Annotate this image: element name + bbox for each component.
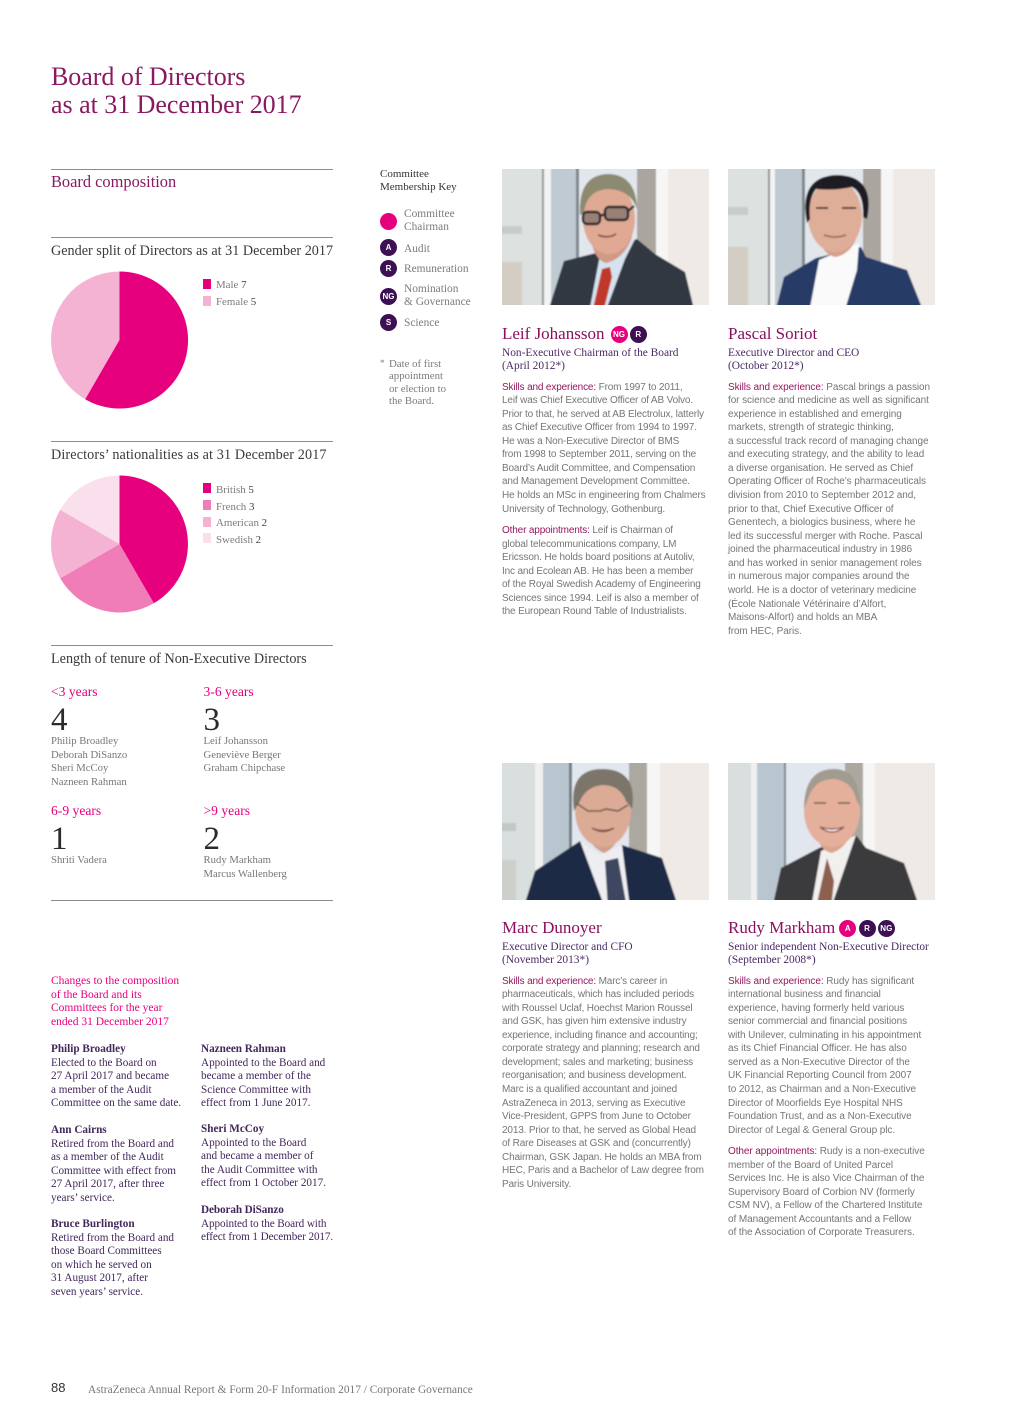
change: Deborah DiSanzo: Deborah DiSanzo [201,1204,284,1216]
changes heading: ended 31 December 2017 [51,1016,169,1028]
key heading: Membership Key [380,181,457,193]
change: Philip Broadley: 27 April 2017 and became [51,1070,169,1082]
biography: Marc Dunoyer: development; sales and marketing; business [502,1057,693,1068]
biography: Leif Johansson: as Chief Executive Officer from 1994 to 1997. [502,422,697,433]
badge: R: R [864,924,870,932]
change: Philip Broadley: Elected to the Board on [51,1057,157,1069]
key item: nomination and governance: & Governance [404,296,471,308]
legend: nationalities: American 2 [216,517,267,529]
tenure block: 3-6 years: Geneviève Berger [204,748,281,760]
biography: Marc Dunoyer: corporate strategy and planning; research and [502,1043,700,1054]
biography: Pascal Soriot: Operating Officer of Roche’s pharmaceuticals [728,476,926,487]
title: Board of Directors [51,62,245,91]
name: Marc Dunoyer: Marc Dunoyer [502,918,602,937]
biography: Marc Dunoyer: reorganisation; and business development. [502,1070,687,1081]
footnote: Date of first [389,358,441,370]
key heading [380,168,457,193]
change: Nazneen Rahman: became a member of the [201,1070,311,1082]
footnote: the Board. [389,395,434,407]
heading: board composition: Board composition [51,172,176,191]
tenure block: 3-6 years [204,684,285,774]
tenure block: under 3 years [51,684,127,788]
other appointments: Leif Johansson: the European Round Table of Industrialists. [502,606,687,617]
change: Sheri McCoy: effect from 1 October 2017. [201,1177,326,1189]
change: Ann Cairns: Retired from the Board and [51,1138,174,1150]
legend: nationalities: Swedish 2 [216,534,261,546]
change: Deborah DiSanzo: Appointed to the Board with [201,1218,326,1230]
photo: Leif Johansson [502,169,709,305]
biography: Marc Dunoyer: and GSK, has given him extensive industry [502,1016,687,1027]
biography: Marc Dunoyer: Chairman, GSK Japan. He holds an MBA from [502,1152,702,1163]
photo: Pascal Soriot [728,169,935,305]
changes heading: of the Board and its [51,989,142,1001]
change: Bruce Burlington: Retired from the Board and [51,1232,174,1244]
other appointments: Leif Johansson: Inc and Ecolean AB. He has been a member [502,566,693,577]
change: Deborah DiSanzo [201,1204,333,1245]
change: Sheri McCoy: Sheri McCoy [201,1123,264,1135]
director card: Pascal Soriot [728,169,935,637]
tenure block: 3-6 years: Leif Johansson [204,735,268,747]
badge: R [630,326,647,342]
other appointments: Rudy Markham: Supervisory Board of Corbion NV (formerly [728,1187,915,1198]
biography: Marc Dunoyer: Paris University. [502,1179,571,1190]
biography: Rudy Markham: with Unilever, culminating in his appointment [728,1030,921,1041]
heading: tenure: Length of tenure of Non-Executive Directors [51,651,307,667]
footer text: AstraZeneca Annual Report & Form 20-F Information 2017 / Corporate Governance [88,1384,473,1396]
other appointments: Rudy Markham: Services Inc. He is also Vice Chairman of the [728,1173,924,1184]
biography: Marc Dunoyer: of Rare Diseases at GSK and (concurrently) [502,1138,691,1149]
role: Marc Dunoyer [502,940,633,966]
tenure block: 3-6 years: Graham Chipchase [204,762,285,774]
biography: Leif Johansson: Prior to that, he served at AB Electrolux, latterly [502,409,704,420]
footnote: appointment [389,370,443,382]
panel: board composition [51,169,333,901]
tenure block: over 9 years: Rudy Markham [204,854,271,866]
director card: Leif Johansson [502,169,709,617]
title [51,62,302,118]
biography: Rudy Markham: senior commercial and financial positions [728,1016,907,1027]
key item: remuneration [380,260,469,277]
biography: Pascal Soriot: a diverse organisation. He served as Chief [728,463,913,474]
tenure block: 6-9 years [51,803,107,866]
biography: Pascal Soriot: led its successful merger with Roche. Pascal [728,531,922,542]
role: Rudy Markham [728,940,929,966]
tenure block: under 3 years: Deborah DiSanzo [51,748,127,760]
biography: Pascal Soriot [728,382,930,637]
legend: nationalities: French 3 [216,501,254,513]
change: Ann Cairns: Committee with effect from [51,1165,176,1177]
biography: Marc Dunoyer: pharmaceuticals, which has included periods [502,989,694,1000]
legend: nationalities: British 5 [216,484,254,496]
biography: Pascal Soriot: from HEC, Paris. [728,626,802,637]
change: Philip Broadley: Committee on the same date. [51,1097,181,1109]
biography: Rudy Markham [728,976,922,1136]
biography: Marc Dunoyer: HEC, Paris and a Bachelor of Law degree from [502,1165,704,1176]
role: Leif Johansson: Non-Executive Chairman of the Board [502,346,678,358]
footnote [380,358,446,407]
biography: Marc Dunoyer: Skills and experience: Marc’s career in [502,976,667,986]
change: Ann Cairns: as a member of the Audit [51,1151,164,1163]
role: Pascal Soriot [728,346,859,372]
key item: science [380,314,440,331]
other appointments: Rudy Markham: CSM NV), a Fellow of the Chartered Institute [728,1200,922,1211]
heading: nationalities: Directors’ nationalities as at 31 December 2017 [51,447,327,463]
other appointments: Leif Johansson: of the Royal Swedish Academy of Engineering [502,579,701,590]
key item: nomination and governance: NG [382,292,394,301]
role: Leif Johansson [502,346,678,372]
key item: audit: A [386,243,391,252]
role: Pascal Soriot: (October 2012*) [728,360,804,372]
biography: Pascal Soriot: and has worked in senior management roles [728,558,922,569]
change: Nazneen Rahman: Appointed to the Board and [201,1057,325,1069]
biography: Pascal Soriot: experience in established and emerging [728,409,902,420]
biography: Marc Dunoyer: with Roussel Uclaf, Hoechst Marion Roussel [502,1003,692,1014]
biography: Marc Dunoyer: Marc is a qualified accountant and joined [502,1084,677,1095]
change: Ann Cairns [51,1124,176,1204]
change: Bruce Burlington: seven years’ service. [51,1286,143,1298]
biography: Leif Johansson [502,382,706,515]
tenure block: over 9 years: Marcus Wallenberg [204,868,287,880]
badge: A chairman [839,920,856,936]
biography: Pascal Soriot: markets, strength of strategic thinking, [728,422,894,433]
role: Pascal Soriot: Executive Director and CEO [728,346,859,358]
role: Leif Johansson: (April 2012*) [502,360,565,372]
other appointments: Leif Johansson [502,525,701,617]
panel: changes to the board [51,975,333,1298]
biography: Pascal Soriot: (École Nationale Vétérinaire d’Alfort, [728,598,886,610]
badge: NG [878,920,895,936]
director card: Rudy Markham [728,763,935,1238]
badge: NG chairman: NG [613,330,625,338]
biography: Leif Johansson: from 1998 to September 2011, serving on the [502,449,696,460]
biography: Marc Dunoyer: Vice-President, GPPS from June to October [502,1111,691,1122]
key item: nomination and governance [380,283,471,308]
biography: Rudy Markham: experience, having formerly held various [728,1003,904,1014]
key item: committee chairman [380,208,455,233]
change: Philip Broadley: Philip Broadley [51,1043,126,1055]
biography: Leif Johansson: Board’s Audit Committee, and Compensation [502,463,695,474]
biography: Pascal Soriot: prior to that, Chief Executive Officer of [728,504,894,515]
other appointments: Rudy Markham: Other appointments: Rudy is a non-executive [728,1146,925,1157]
tenure block: over 9 years: >9 years [204,803,250,818]
tenure block: 3-6 years: 3 [204,702,220,738]
biography: Leif Johansson: He was a Non-Executive Director of BMS [502,436,679,447]
biography: Leif Johansson: Leif was Chief Executive Officer of AB Volvo. [502,395,693,406]
changes heading: Committees for the year [51,1002,162,1014]
biography: Rudy Markham: Foundation Trust, and as a Non-Executive [728,1111,912,1122]
badge: R: R [635,330,641,338]
change: Bruce Burlington: on which he served on [51,1259,152,1271]
tenure block: under 3 years: Sheri McCoy [51,762,108,774]
key item: science: S [386,318,391,327]
photo: Marc Dunoyer [502,763,709,900]
key item: audit: Audit [404,242,430,254]
key item: science: Science [404,317,439,329]
change: Bruce Burlington: 31 August 2017, after [51,1272,148,1284]
key item: audit [380,239,430,256]
change: Nazneen Rahman: Nazneen Rahman [201,1043,286,1055]
biography: Rudy Markham: as its Chief Financial Officer. He has also [728,1043,907,1054]
biography: Pascal Soriot: and executing strategy, and the ability to lead [728,449,924,460]
role: Rudy Markham: Senior independent Non-Executive Director [728,940,929,952]
change: Deborah DiSanzo: effect from 1 December 2017. [201,1231,333,1243]
footer [51,1380,473,1398]
tenure block: under 3 years: 4 [51,702,68,738]
key item: remuneration: Remuneration [404,263,469,275]
pie chart: nationalities [51,476,188,612]
biography: Leif Johansson: He holds an MSc in engineering from Chalmers [502,490,706,501]
other appointments: Rudy Markham [728,1146,925,1238]
change: Bruce Burlington: Bruce Burlington [51,1218,135,1230]
tenure block: over 9 years [204,803,287,880]
biography: Pascal Soriot: world. He is a doctor of veterinary medicine [728,585,916,596]
role: Marc Dunoyer: Executive Director and CFO [502,940,633,952]
biography: Pascal Soriot: for science and medicine as well as significant [728,395,929,406]
legend: gender split [203,279,256,308]
tenure block: under 3 years: <3 years [51,684,98,699]
photo: Rudy Markham [728,763,935,900]
biography: Rudy Markham: served as a Non-Executive Director of the [728,1057,910,1068]
change: Ann Cairns: Ann Cairns [51,1124,107,1136]
biography: Marc Dunoyer: experience, including finance and accounting; [502,1030,698,1041]
other appointments: Leif Johansson: Ericsson. He holds board positions at Autoliv, [502,552,694,563]
role: Marc Dunoyer: (November 2013*) [502,954,589,966]
name: Leif Johansson: Leif Johansson [502,324,604,343]
biography: Marc Dunoyer: AstraZeneca in 2013, serving as Executive [502,1098,685,1109]
biography: Rudy Markham: UK Financial Reporting Council from 2007 [728,1070,912,1081]
role: Rudy Markham: (September 2008*) [728,954,816,966]
other appointments: Leif Johansson: global telecommunications company, LM [502,539,676,550]
change: Ann Cairns: 27 April 2017, after three [51,1178,164,1190]
biography: Pascal Soriot: Skills and experience: Pascal brings a passion [728,382,930,392]
tenure block: over 9 years: 2 [204,821,220,857]
name: Pascal Soriot: Pascal Soriot [728,324,817,343]
biography: Leif Johansson: Skills and experience: From 1997 to 2011, [502,382,682,392]
biography: Rudy Markham: Skills and experience: Rudy has significant [728,976,914,986]
heading: gender split: Gender split of Directors as at 31 December 2017 [51,243,333,259]
key item: committee chairman: Chairman [404,221,449,233]
change: Sheri McCoy [201,1123,326,1191]
biography: Leif Johansson: and Management Development Committee. [502,476,690,487]
biography: Rudy Markham: to 2012, as Chairman and a Non-Executive [728,1084,916,1095]
change: Bruce Burlington: those Board Committees [51,1245,162,1257]
name: Rudy Markham: Rudy Markham [728,918,835,937]
footnote: or election to [389,383,446,395]
biography: Pascal Soriot: a successful track record of managing change [728,436,928,447]
title: as at 31 December 2017 [51,90,302,118]
change: Nazneen Rahman: effect from 1 June 2017. [201,1097,310,1109]
footnote: * [380,358,384,368]
change: Sheri McCoy: Appointed to the Board [201,1137,306,1149]
legend: nationalities [203,483,267,546]
key item: remuneration: R [386,264,391,273]
change: Bruce Burlington [51,1218,174,1299]
other appointments: Leif Johansson: Other appointments: Leif is Chairman of [502,525,673,536]
change: Nazneen Rahman [201,1043,325,1111]
badge: NG chairman [610,326,628,342]
other appointments: Leif Johansson: Sciences since 1994. Leif is also a member of [502,593,699,604]
changes heading [51,975,179,1028]
biography: Pascal Soriot: in numerous major companies around the [728,571,910,582]
tenure block: 6-9 years: 6-9 years [51,803,101,818]
change: Sheri McCoy: the Audit Committee with [201,1164,318,1176]
biography: Rudy Markham: Director of Legal & General Group plc. [728,1125,895,1136]
biography: Marc Dunoyer: 2013. Prior to that, he served as Global Head [502,1125,696,1136]
tenure block: 3-6 years: 3-6 years [204,684,254,699]
change: Philip Broadley: a member of the Audit [51,1084,152,1096]
badge: A chairman: A [845,924,851,932]
change: Sheri McCoy: and became a member of [201,1150,313,1162]
change: Philip Broadley [51,1043,181,1109]
biography: Pascal Soriot: joined the pharmaceutical industry in 1986 [728,544,912,555]
other appointments: Rudy Markham: member of the Board of United Parcel [728,1160,893,1171]
key item: committee chairman: Committee [404,208,455,220]
other appointments: Rudy Markham: of Management Accountants and a Fellow [728,1214,911,1225]
change: Ann Cairns: years’ service. [51,1192,115,1204]
tenure block: 6-9 years: 1 [51,821,68,857]
badge: R [858,920,876,936]
pie chart: gender split [51,272,188,408]
biography: Pascal Soriot: Maisons-Alfort) and holds an MBA [728,612,877,623]
biography: Leif Johansson: University of Technology, Gothenburg. [502,504,665,515]
other appointments: Rudy Markham: of the Association of Corporate Treasurers. [728,1227,915,1238]
change: Nazneen Rahman: Science Committee with [201,1084,311,1096]
legend: gender split: Female 5 [216,296,256,308]
biography: Pascal Soriot: division from 2010 to September 2012 and, [728,490,916,501]
biography: Marc Dunoyer [502,976,704,1190]
changes heading: Changes to the composition [51,975,179,987]
badge: NG: NG [880,924,892,932]
key heading: Committee [380,168,429,180]
biography: Pascal Soriot: Genentech, a biologics business, where he [728,517,915,528]
tenure block: under 3 years: Philip Broadley [51,735,118,747]
director card: Marc Dunoyer [502,763,709,1190]
panel: committee membership key [380,168,471,407]
biography: Rudy Markham: Director of Moorfields Eye Hospital NHS [728,1098,903,1109]
page number: 88 [51,1380,65,1395]
tenure block: under 3 years: Nazneen Rahman [51,776,127,788]
legend: gender split: Male 7 [216,279,247,291]
tenure block: 6-9 years: Shriti Vadera [51,854,107,866]
biography: Rudy Markham: international business and financial [728,989,881,1000]
key item: nomination and governance: Nomination [404,283,458,295]
